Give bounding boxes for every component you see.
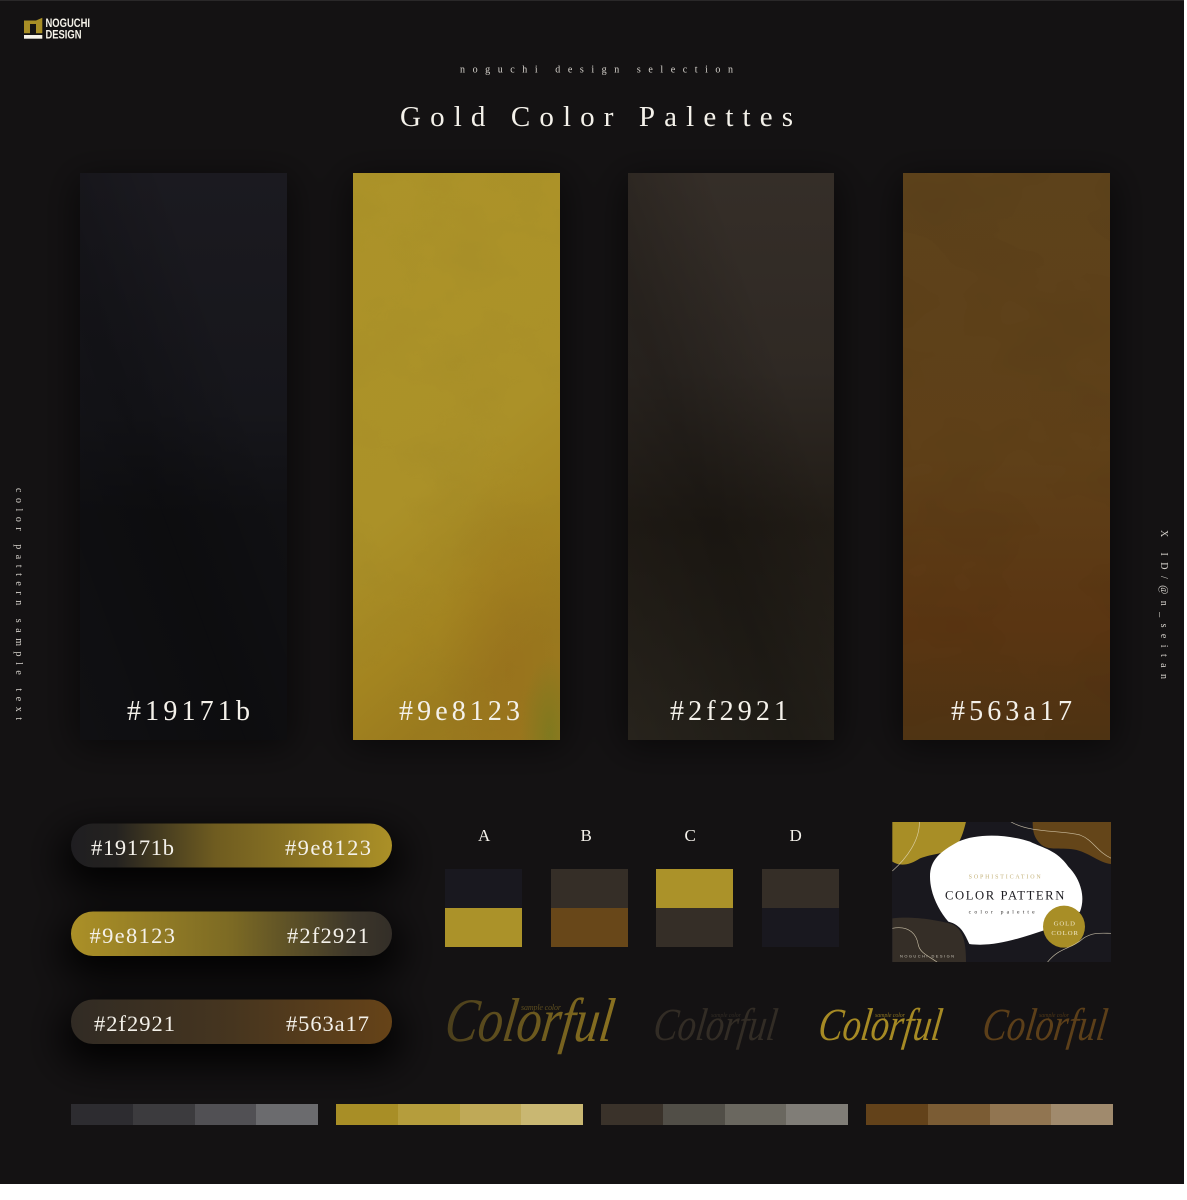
panel: #563a17 [903, 173, 1110, 740]
icon: gold arch mark [24, 18, 42, 39]
card text: noguchi design: NOGUCHI DESIGN [900, 953, 954, 958]
swatch pair C: C [684, 826, 696, 845]
gradient pill: #2f2921 to #563a17 [71, 1000, 392, 1044]
swatch pair A: A [478, 826, 491, 845]
logo wordmark: NOGUCHI [46, 17, 90, 30]
panel label: #2f2921 [670, 696, 788, 727]
sample wordmark: brown: Colorful [980, 999, 1111, 1050]
sample wordmark: large: Colorful [441, 986, 619, 1055]
card shape: gold circle [1043, 906, 1085, 948]
logo: Noguchi Design [24, 17, 90, 41]
panel: #2f2921 [628, 173, 834, 740]
gradient pill: #19171b to #9e8123: #9e8123 [285, 835, 371, 860]
panel label: #563a17 [951, 696, 1072, 727]
panel label: #19171b [127, 696, 250, 727]
card shape: white blob [930, 836, 1082, 945]
gradient pill: #9e8123 to #2f2921: #9e8123 [90, 923, 175, 948]
card decorative lines [892, 822, 1111, 962]
sample wordmark: dark: sample color [711, 1013, 742, 1019]
subtitle: noguchi design selection [460, 64, 733, 76]
gradient pill: #2f2921 to #563a17: #2f2921 [94, 1011, 175, 1036]
swatch pair D: D [790, 826, 802, 845]
card text: color palette: color palette [969, 909, 1035, 915]
card text: color pattern: COLOR PATTERN [945, 888, 1064, 902]
card text: gold color: GOLD [1054, 920, 1075, 927]
swatch pair C [656, 826, 733, 947]
card text: gold color [1052, 922, 1078, 935]
sample wordmark: gold: sample color [875, 1013, 906, 1019]
swatch pair D [762, 826, 839, 947]
tint strip: navy [71, 1104, 318, 1125]
gradient pill: #19171b to #9e8123 [71, 824, 392, 868]
sample wordmark: brown: sample color [1039, 1013, 1070, 1019]
logo wordmark [46, 17, 90, 41]
tint strip: brown [866, 1104, 1113, 1125]
panel label: #9e8123 [399, 696, 520, 727]
panel: #9e8123 [353, 173, 560, 740]
tint strip: gold [336, 1104, 583, 1125]
gradient pill: #9e8123 to #2f2921: #2f2921 [287, 923, 369, 948]
gradient pill: #2f2921 to #563a17: #563a17 [286, 1011, 369, 1036]
swatch pair A [445, 826, 522, 947]
panel: #19171b [80, 173, 287, 740]
sample wordmark: dark: Colorful [651, 999, 781, 1050]
title: Gold Color Palettes [400, 101, 793, 133]
pill shadows [62, 833, 401, 1063]
card shape: gold blob [892, 822, 966, 865]
panel shadows [76, 178, 1114, 746]
sample card: color pattern [892, 822, 1111, 962]
card text: sophistication: SOPHISTICATION [969, 875, 1041, 881]
tint strip: umber [601, 1104, 848, 1125]
logo wordmark: DESIGN [46, 28, 82, 41]
side text: right vertical: X ID/@n_seitan [1158, 530, 1169, 679]
side text: left vertical: color pattern sample text [13, 488, 24, 720]
card text: gold color: COLOR [1051, 930, 1079, 937]
swatch pair B [551, 826, 628, 947]
gradient pill: #19171b to #9e8123: #19171b [91, 835, 174, 860]
sample wordmark: gold: Colorful [816, 999, 946, 1050]
swatch pair B: B [580, 826, 592, 845]
card shape: brown blob [1033, 822, 1111, 864]
sample wordmark: large: sample color [521, 1003, 562, 1012]
gradient pill: #9e8123 to #2f2921 [71, 912, 392, 956]
card shape: dark blob [892, 918, 966, 962]
